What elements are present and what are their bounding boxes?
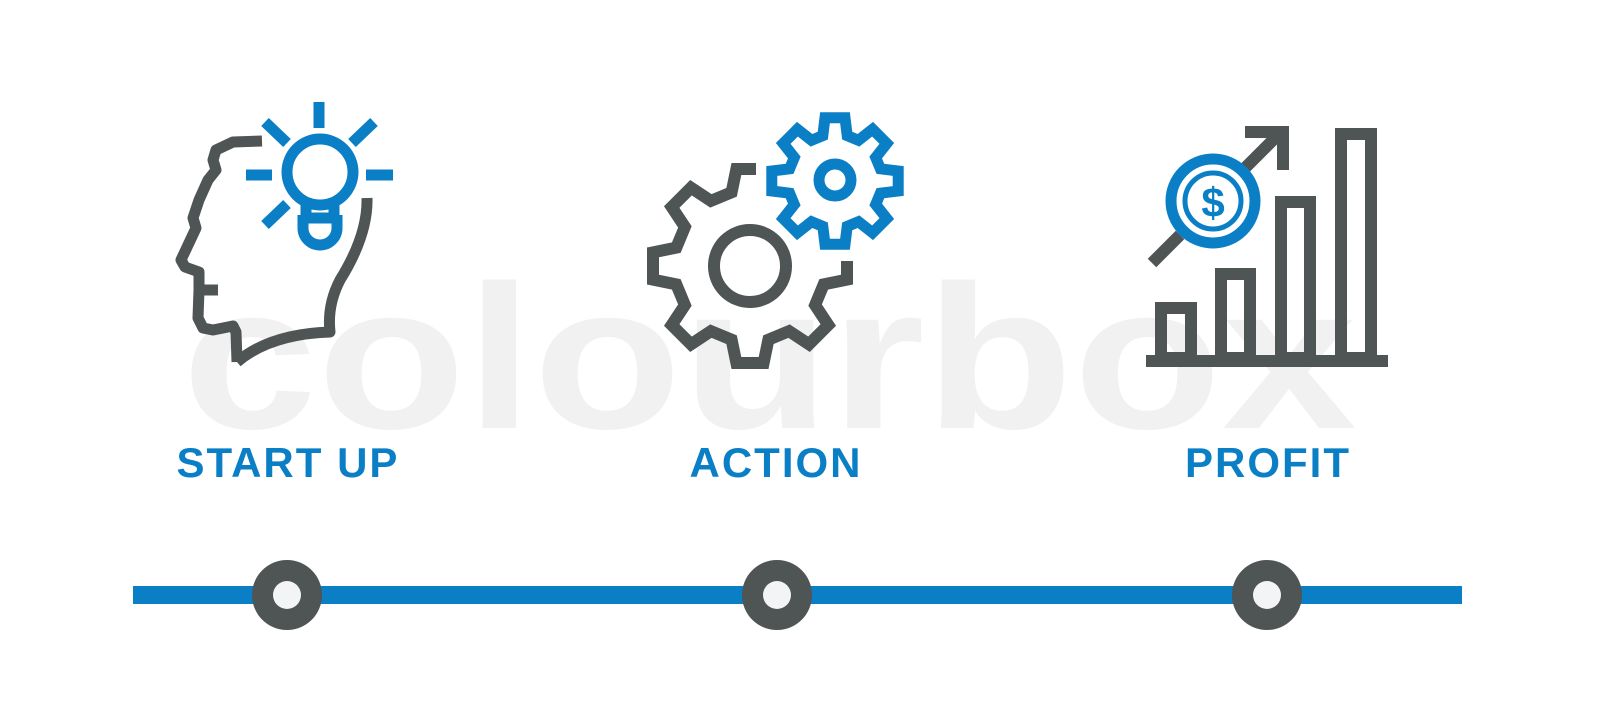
icon: head with light bulb: [181, 102, 393, 362]
magnifier with dollar: [1171, 159, 1255, 243]
label: action: ACTION: [690, 439, 862, 486]
labels: [177, 439, 1351, 486]
milestone 1: [252, 560, 322, 630]
icon: profit chart: $: [1201, 179, 1225, 226]
blue gear: [772, 118, 898, 244]
icon: gears: [653, 118, 898, 363]
bulb: [246, 102, 393, 245]
label: profit: PROFIT: [1185, 439, 1351, 486]
gray gear: [653, 169, 847, 363]
watermark: colourbox: [182, 243, 1357, 472]
head outline: [181, 141, 367, 362]
icon: profit chart: [1146, 130, 1388, 361]
label: start up: START UP: [177, 439, 399, 486]
milestone 3: [1232, 560, 1302, 630]
timeline: [133, 560, 1462, 630]
bars: [1146, 130, 1388, 361]
milestone 2: [742, 560, 812, 630]
